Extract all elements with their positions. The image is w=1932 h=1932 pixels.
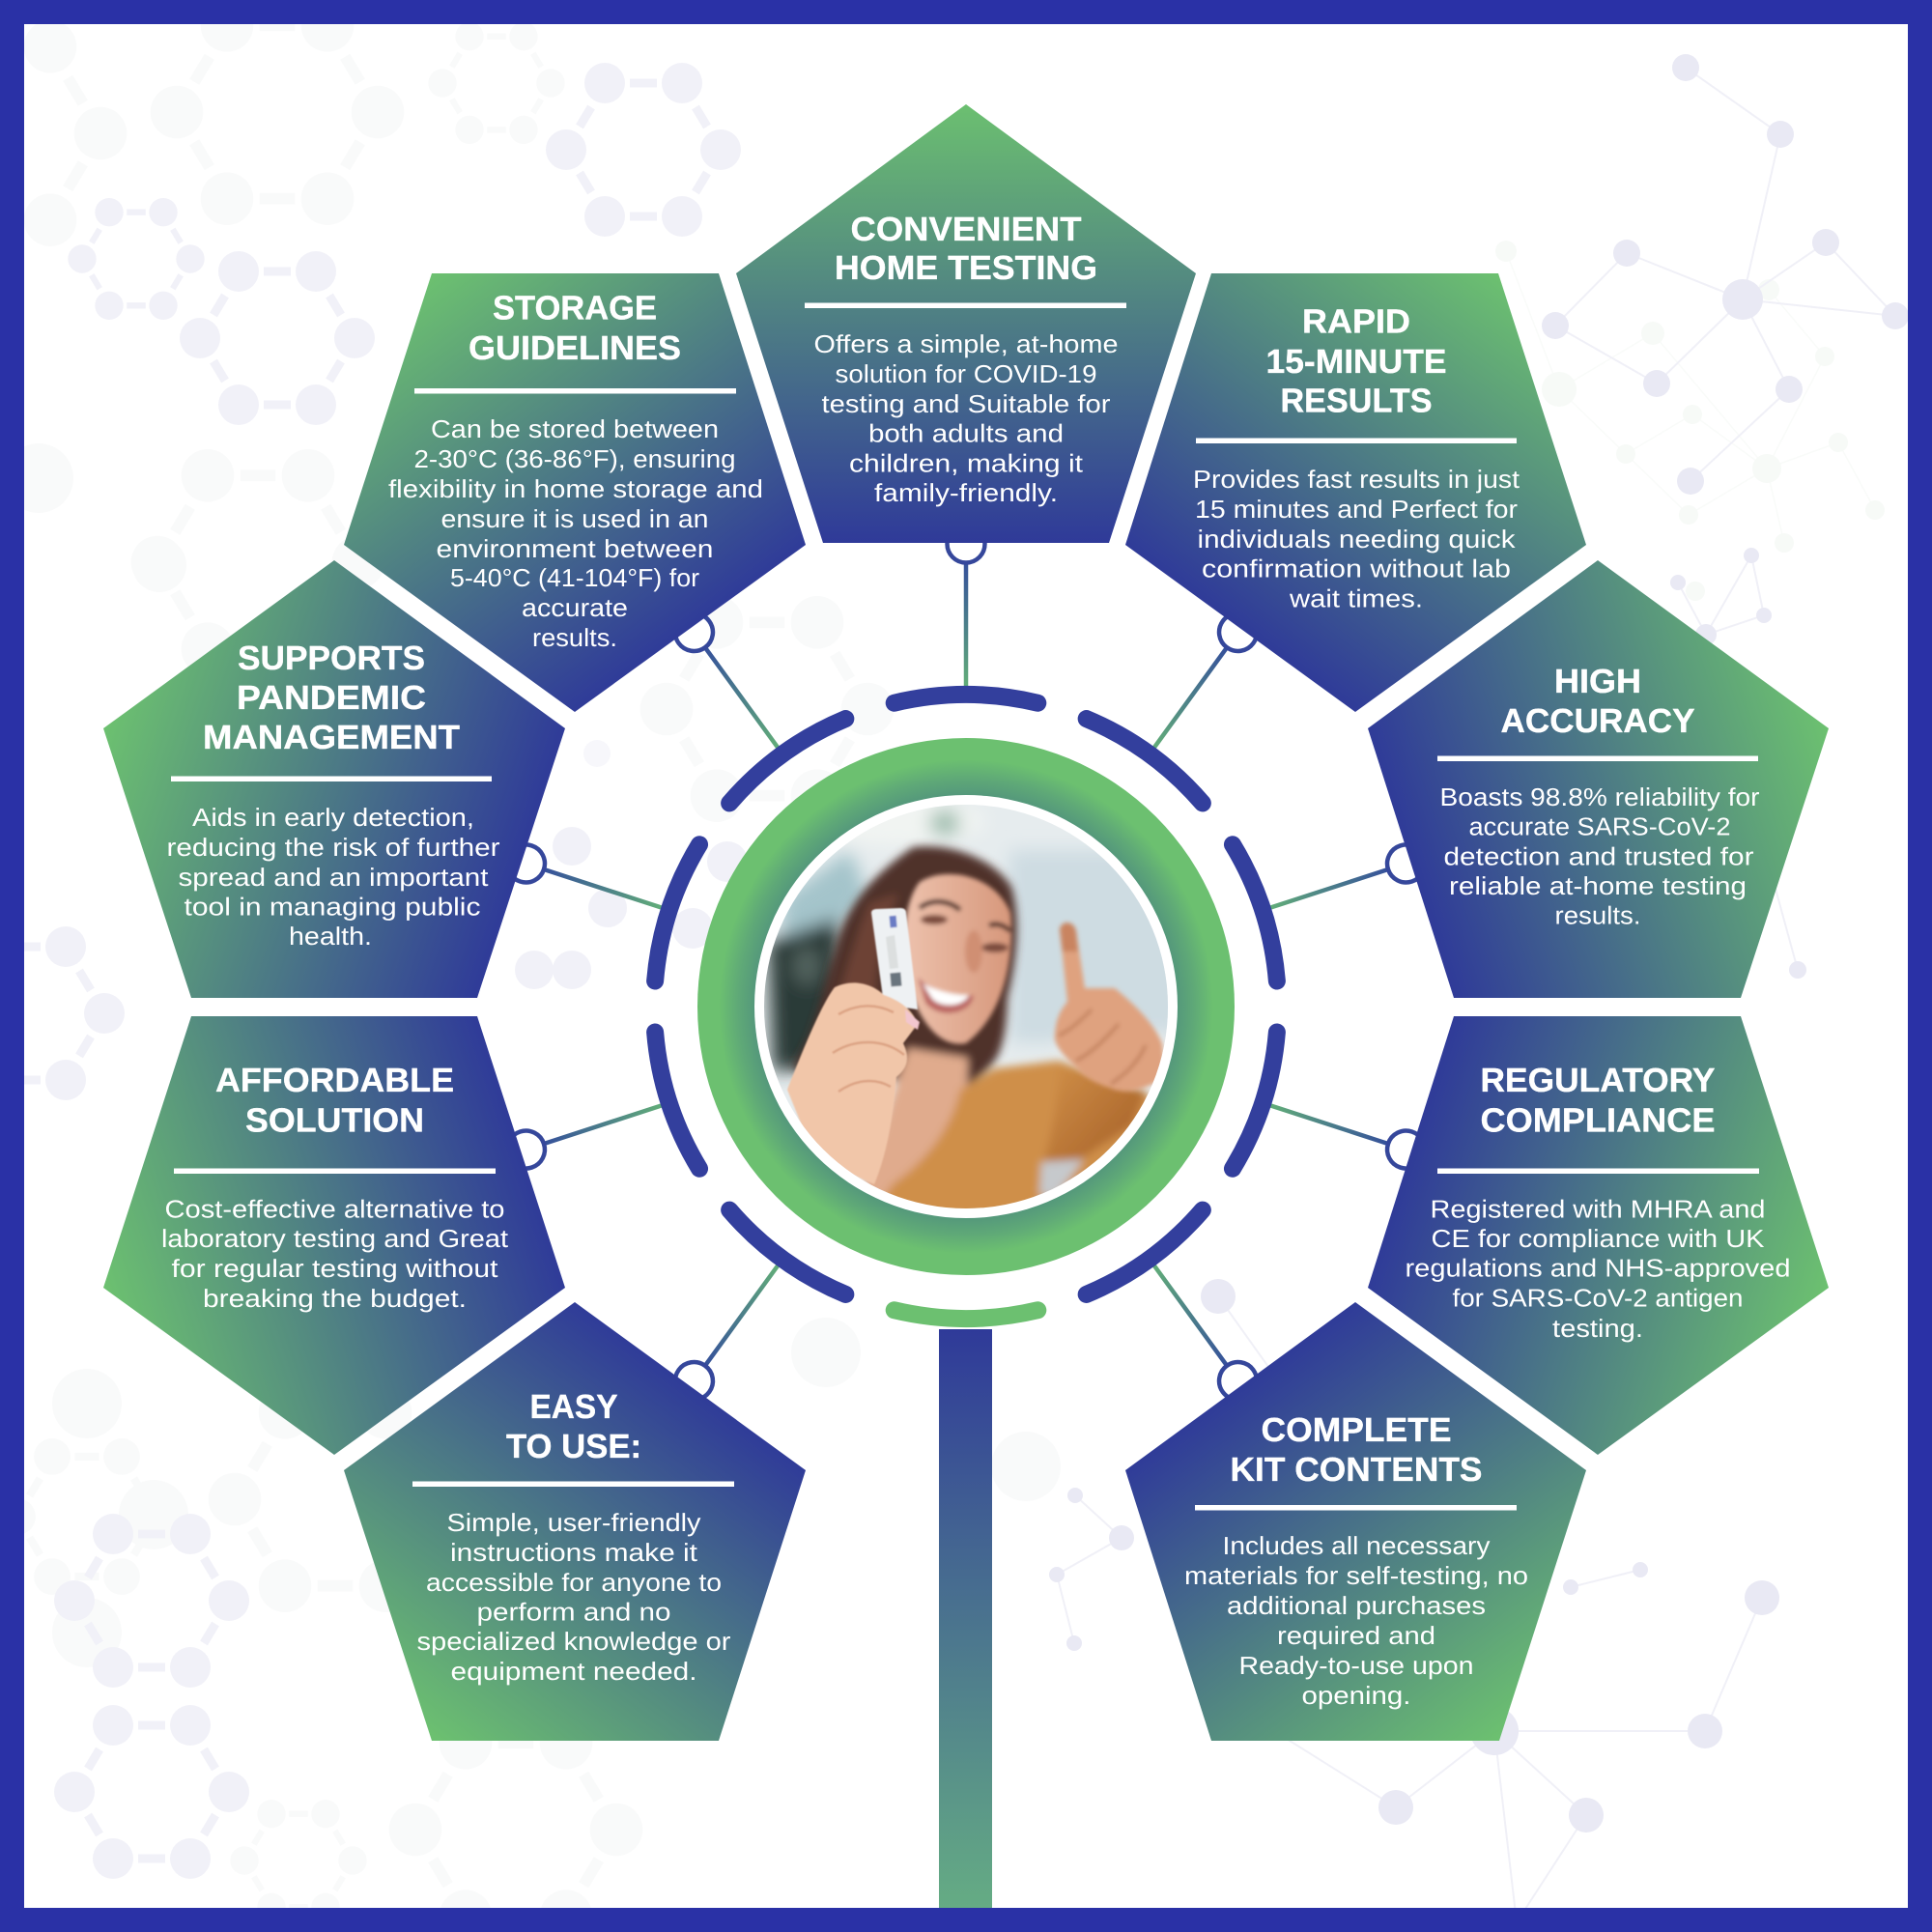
panel: convenient home testing xyxy=(736,104,1196,543)
body text: accurate SARS-CoV-2 xyxy=(1468,811,1731,840)
heading: RESULTS xyxy=(1281,383,1432,419)
body text: Can be stored between xyxy=(431,414,719,443)
heading: ACCURACY xyxy=(1501,702,1694,740)
pentagon xyxy=(1125,1302,1586,1741)
connector: complete kit xyxy=(1138,1254,1264,1407)
heading xyxy=(1231,1411,1482,1489)
heading: GUIDELINES xyxy=(469,329,681,367)
body text xyxy=(1184,1531,1528,1710)
divider xyxy=(1196,439,1517,443)
panel: storage guidelines xyxy=(344,273,806,712)
panel: high accuracy xyxy=(1368,560,1829,998)
connector: supports pandemic xyxy=(502,839,668,926)
divider xyxy=(412,1482,734,1487)
body text: accurate xyxy=(522,593,628,622)
body text xyxy=(1193,465,1520,612)
heading xyxy=(506,1388,641,1465)
heading: STORAGE xyxy=(493,290,657,327)
pentagon xyxy=(1125,273,1586,712)
body text: testing and Suitable for xyxy=(821,389,1111,418)
connector: regulatory compliance xyxy=(1264,1087,1430,1174)
photo: woman holding a test cassette, thumbs up xyxy=(764,805,1168,1208)
heading: AFFORDABLE xyxy=(215,1062,454,1099)
divider xyxy=(414,388,736,394)
heading xyxy=(1501,663,1694,740)
body text: detection and trusted for xyxy=(1443,842,1754,871)
body text: for regular testing without xyxy=(172,1254,498,1283)
heading: HOME TESTING xyxy=(835,249,1097,287)
heading: RAPID xyxy=(1302,303,1410,340)
body text: family-friendly. xyxy=(874,478,1058,507)
pentagon xyxy=(103,560,565,998)
body text: accessible for anyone to xyxy=(426,1568,722,1597)
body text: environment between xyxy=(437,534,713,563)
body text: testing. xyxy=(1552,1314,1643,1343)
heading: TO USE: xyxy=(506,1428,641,1465)
heading: SOLUTION xyxy=(245,1101,424,1140)
body text xyxy=(166,803,500,951)
divider xyxy=(805,303,1126,308)
heading: 15-MINUTE xyxy=(1265,343,1447,381)
heading xyxy=(203,639,460,756)
body text: required and xyxy=(1277,1621,1435,1650)
body text xyxy=(1405,1194,1791,1343)
body text: Cost-effective alternative to xyxy=(164,1194,504,1223)
body text: instructions make it xyxy=(450,1538,698,1567)
body text: individuals needing quick xyxy=(1198,525,1517,554)
body text: Aids in early detection, xyxy=(192,803,474,832)
panel: affordable solution xyxy=(103,1016,565,1455)
heading: COMPLETE xyxy=(1262,1411,1451,1449)
connector: easy to use xyxy=(668,1254,794,1407)
heading: EASY xyxy=(529,1388,618,1426)
heading xyxy=(1480,1062,1716,1140)
body text: reliable at-home testing xyxy=(1449,871,1747,900)
body text: perform and no xyxy=(477,1598,670,1627)
body text: Provides fast results in just xyxy=(1193,465,1520,494)
body text: CE for compliance with UK xyxy=(1432,1224,1765,1253)
body text: health. xyxy=(289,922,372,951)
body text xyxy=(417,1508,731,1686)
body text: Boasts 98.8% reliability for xyxy=(1439,782,1760,811)
divider xyxy=(1437,755,1758,761)
body text: breaking the budget. xyxy=(203,1284,467,1313)
body text: confirmation without lab xyxy=(1202,554,1511,583)
pentagon xyxy=(1368,560,1829,998)
body text: spread and an important xyxy=(178,863,489,892)
heading: PANDEMIC xyxy=(237,679,426,717)
body text xyxy=(1439,782,1760,929)
heading xyxy=(469,290,681,367)
body text: results. xyxy=(532,623,617,652)
heading: CONVENIENT xyxy=(850,211,1082,248)
divider xyxy=(1437,1169,1759,1174)
pentagon xyxy=(103,1016,565,1455)
heading: KIT CONTENTS xyxy=(1231,1451,1482,1489)
segmented outer ring xyxy=(647,695,1285,1319)
heading xyxy=(1265,303,1447,419)
body text: laboratory testing and Great xyxy=(161,1224,509,1253)
pentagon xyxy=(344,273,806,712)
heading xyxy=(215,1062,454,1140)
connector: storage xyxy=(668,606,794,759)
heading: MANAGEMENT xyxy=(203,719,460,756)
divider xyxy=(1195,1505,1517,1511)
body text: additional purchases xyxy=(1227,1591,1486,1620)
body text: Simple, user-friendly xyxy=(446,1508,701,1537)
connector: high accuracy xyxy=(1264,839,1430,926)
body text: tool in managing public xyxy=(184,893,481,922)
divider xyxy=(171,777,492,781)
body text: for SARS-CoV-2 antigen xyxy=(1453,1283,1743,1312)
body text: both adults and xyxy=(868,419,1064,448)
body text: results. xyxy=(1555,900,1640,929)
body text: flexibility in home storage and xyxy=(388,474,763,503)
heading xyxy=(835,211,1097,287)
panel: easy to use xyxy=(344,1302,806,1741)
connector: convenient home testing xyxy=(947,526,985,688)
body text: wait times. xyxy=(1289,583,1423,612)
body text xyxy=(161,1194,509,1313)
body text: 2-30°C (36-86°F), ensuring xyxy=(413,444,736,473)
pentagon xyxy=(1368,1016,1829,1455)
body text: materials for self-testing, no xyxy=(1184,1561,1528,1590)
heading: HIGH xyxy=(1554,663,1641,700)
body text: 15 minutes and Perfect for xyxy=(1195,495,1518,524)
body text: specialized knowledge or xyxy=(417,1627,731,1656)
body text: Ready-to-use upon xyxy=(1238,1651,1474,1680)
connector: affordable xyxy=(502,1087,668,1174)
body text: Includes all necessary xyxy=(1223,1531,1490,1560)
pentagon xyxy=(344,1302,806,1741)
body text: children, making it xyxy=(849,448,1084,477)
body text: opening. xyxy=(1302,1681,1410,1710)
heading: REGULATORY xyxy=(1480,1062,1716,1099)
white ring xyxy=(754,795,1178,1218)
body text: ensure it is used in an xyxy=(440,504,709,533)
body text: Offers a simple, at-home xyxy=(813,329,1119,358)
divider xyxy=(174,1169,496,1174)
heading: COMPLIANCE xyxy=(1480,1101,1716,1140)
body text: equipment needed. xyxy=(450,1657,697,1686)
body text: solution for COVID-19 xyxy=(835,359,1097,388)
green ring xyxy=(697,738,1235,1275)
panel: rapid 15-minute results xyxy=(1125,273,1586,712)
body text: 5-40°C (41-104°F) for xyxy=(450,563,699,592)
panel: supports pandemic management xyxy=(103,560,565,998)
pentagon xyxy=(736,104,1196,543)
body text: Registered with MHRA and xyxy=(1430,1194,1766,1223)
connectors from hub to panels xyxy=(502,526,1430,1407)
connector: rapid results xyxy=(1138,606,1264,759)
stem xyxy=(939,1329,992,1909)
body text: regulations and NHS-approved xyxy=(1405,1254,1791,1283)
body text xyxy=(813,329,1119,507)
body text: reducing the risk of further xyxy=(166,833,500,862)
body text xyxy=(388,414,763,652)
heading: SUPPORTS xyxy=(238,639,425,677)
panel: complete kit contents xyxy=(1125,1302,1586,1741)
panel: regulatory compliance xyxy=(1368,1016,1829,1455)
